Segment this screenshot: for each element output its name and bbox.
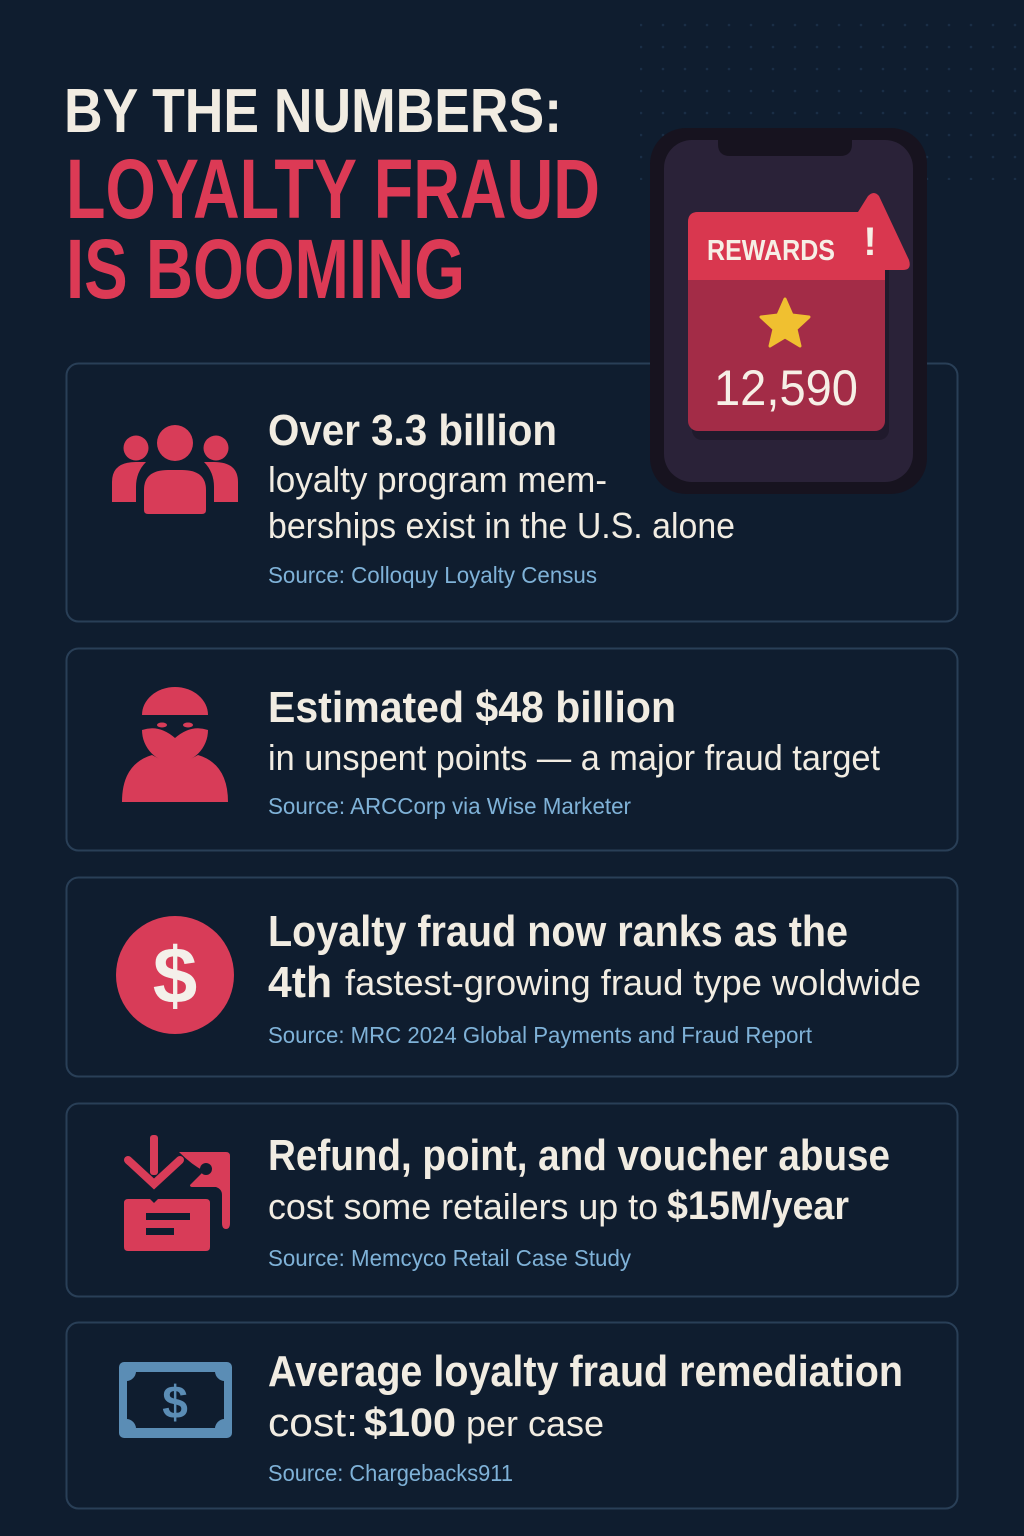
title <box>64 77 600 316</box>
rewards card: 12,590 <box>714 360 858 416</box>
panel: unspent points <box>66 648 958 850</box>
icon: refund voucher <box>124 1135 230 1251</box>
text: stat 5: $100 <box>364 1401 456 1445</box>
text: stat 1: berships exist in the U.S. alone <box>268 505 735 546</box>
text: stat 5: Average loyalty fraud remediation <box>268 1347 903 1396</box>
icon: dollar coin: $ <box>153 931 197 1020</box>
text: stat 5: per case <box>466 1403 604 1444</box>
icon: star <box>761 299 809 346</box>
title: LOYALTY FRAUD <box>66 142 600 236</box>
text: stat 2 <box>268 683 880 819</box>
text: stat 1: loyalty program mem- <box>268 459 607 500</box>
title: BY THE NUMBERS: <box>64 77 562 146</box>
title: IS BOOMING <box>66 222 465 316</box>
text: stat 1: Over 3.3 billion <box>268 406 557 455</box>
text: stat 4 <box>268 1131 890 1271</box>
text: stat 5: Source: Chargebacks911 <box>268 1460 513 1486</box>
panel: remediation cost <box>66 1322 958 1508</box>
text: stat 3 <box>268 907 921 1048</box>
rewards card: REWARDS <box>707 235 835 267</box>
text: stat 5: cost: <box>268 1401 358 1445</box>
text: stat 2: Source: ARCCorp via Wise Marketer <box>268 793 631 819</box>
icon: thief <box>122 687 228 802</box>
text: stat 2: in unspent points — a major fraud target <box>268 737 880 778</box>
phone with rewards card <box>650 128 927 494</box>
icon: dollar coin <box>116 916 234 1034</box>
icon: people <box>112 425 238 514</box>
text: stat 4: Refund, point, and voucher abuse <box>268 1131 890 1180</box>
text: stat 5 <box>268 1347 903 1486</box>
text: stat 3: fastest-growing fraud type woldwide <box>345 962 921 1003</box>
text: stat 2: Estimated $48 billion <box>268 683 676 732</box>
panel: memberships <box>66 364 958 622</box>
rewards card: ! <box>863 220 877 264</box>
text: stat 4: $15M/year <box>667 1184 849 1228</box>
rewards card <box>688 193 910 440</box>
panel: refund abuse <box>66 1104 958 1296</box>
text: stat 4: cost some retailers up to <box>268 1186 658 1227</box>
text: stat 3: Loyalty fraud now ranks as the <box>268 907 848 956</box>
text: stat 1: Source: Colloquy Loyalty Census <box>268 562 597 588</box>
text: stat 4: Source: Memcyco Retail Case Study <box>268 1245 631 1271</box>
text: stat 3: Source: MRC 2024 Global Payments and Fraud Report <box>268 1022 813 1048</box>
icon: banknote: $ <box>162 1376 188 1428</box>
text: stat 1 <box>268 406 735 588</box>
icon: banknote <box>119 1362 232 1438</box>
panel: fraud ranking <box>66 878 958 1076</box>
text: stat 3: 4th <box>268 958 332 1007</box>
